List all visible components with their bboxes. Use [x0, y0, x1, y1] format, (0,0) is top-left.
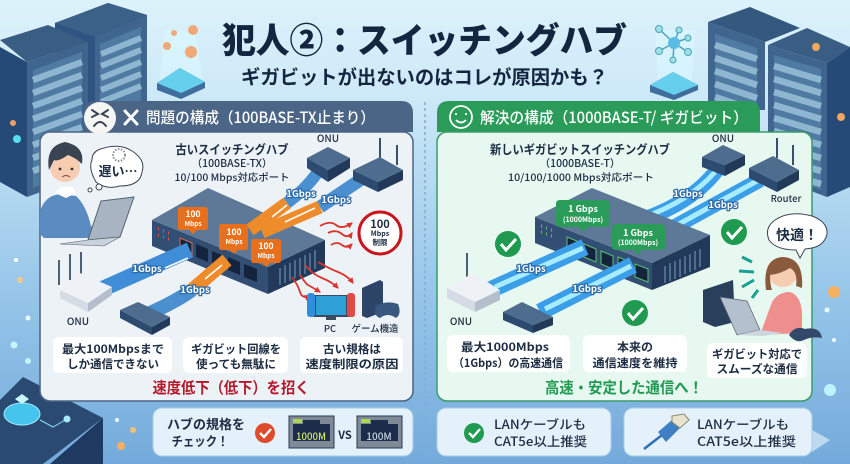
- divider: [424, 102, 426, 456]
- VS: VS: [337, 427, 352, 443]
- note 1: しか通信できない: [67, 356, 159, 372]
- badges: 100 Mbps: 100: [258, 240, 274, 252]
- switch standard: （1000BASE-T）: [540, 156, 620, 171]
- ONU white: [447, 253, 500, 312]
- cable speed labels: 1Gbps: [516, 261, 546, 275]
- check marks: [495, 219, 747, 326]
- note 1: [53, 337, 172, 373]
- holographic device right: [650, 26, 698, 100]
- note 1: 最大1000Mbps: [461, 339, 549, 355]
- panel: LAN cable note with cable icon: [624, 408, 812, 456]
- result text: 速度低下（低下）を招く: [152, 376, 310, 398]
- note 1: （1Gbps）の高速通信: [453, 355, 563, 371]
- switch ports: 10/100 Mbps対応ポート: [174, 169, 290, 184]
- panel: check hub standard: [153, 408, 413, 456]
- badges: 100 Mbps: Mbps: [257, 250, 275, 260]
- badges: 100 Mbps: 100: [185, 208, 201, 220]
- labels PC and console: PC: [324, 321, 336, 335]
- top router: [353, 138, 403, 192]
- router: [749, 138, 799, 192]
- server bottom left: [0, 342, 103, 464]
- port 100M: [357, 416, 402, 448]
- rear cables: [287, 172, 363, 207]
- note 3: [300, 337, 403, 373]
- port 1000M: 1000M: [296, 428, 326, 443]
- labels PC and console: [324, 321, 399, 335]
- limit sign: 100: [370, 216, 390, 232]
- badge: 1 Gbps second: [612, 224, 665, 255]
- panel: LAN cable note with cable icon: CAT5e以上推奨: [697, 431, 797, 450]
- port 100M: 100M: [366, 428, 392, 443]
- old switching hub: [152, 188, 325, 294]
- switch ports: 10/100/1000 Mbps対応ポート: [508, 169, 654, 184]
- note 1: 最大100Mbpsまで: [62, 341, 164, 357]
- note 2: 使っても無駄に: [196, 356, 276, 372]
- label ONU: ONU: [317, 130, 339, 145]
- cable speed labels: 1Gbps: [180, 282, 210, 296]
- icon: LAN cable: [644, 414, 689, 449]
- small switch: [503, 302, 553, 333]
- badge: 1 Gbps: 1 Gbps: [568, 202, 598, 215]
- cable speed labels: [516, 186, 738, 295]
- speech bubble: slow: [88, 146, 143, 192]
- subtitle: ギガビットが出ないのはコレが原因かも？: [241, 61, 608, 90]
- label router: Router: [771, 191, 801, 205]
- note 2: ギガビット回線を: [191, 341, 281, 357]
- ONU top: [702, 145, 745, 176]
- badge: 1 Gbps: (1000Mbps): [563, 215, 603, 225]
- panel: solution configuration: [437, 101, 827, 401]
- note 1: [447, 335, 570, 372]
- note 2: [583, 335, 687, 372]
- small switch: [120, 302, 170, 335]
- port 1000M: [289, 416, 334, 448]
- panel: problem configuration: [40, 101, 413, 401]
- rear cables: [635, 170, 760, 232]
- labels PC and console: ゲーム機造: [352, 321, 399, 335]
- note 3: 古い規格は: [323, 341, 382, 357]
- front cables: [490, 247, 633, 312]
- label ONU: ONU: [712, 130, 734, 145]
- header text: 解決の構成（1000BASE-T/ ギガビット）: [480, 106, 748, 128]
- cable speed labels: 1Gbps: [286, 186, 316, 200]
- note 3: [707, 343, 807, 378]
- panel header: [84, 101, 413, 132]
- person with laptop: [703, 257, 822, 341]
- cable speed labels: 1Gbps: [708, 197, 738, 211]
- switch heading: 新しいギガビットスイッチングハブ: [490, 139, 670, 158]
- panel header: [437, 101, 760, 132]
- note 2: 本来の: [617, 339, 653, 355]
- panel body: [437, 132, 812, 401]
- label ONU bottom: ONU: [450, 313, 472, 328]
- badge: 1 Gbps second: 1 Gbps: [623, 226, 653, 239]
- game console and PC: [307, 280, 400, 320]
- title: 犯人②：スイッチングハブ: [222, 13, 627, 64]
- switch standard: （100BASE-TX）: [192, 156, 272, 171]
- cable speed labels: 1Gbps: [673, 186, 703, 200]
- panel: LAN cable note: [437, 408, 611, 456]
- badge: 1 Gbps: [556, 200, 610, 232]
- speech bubble: comfortable: [767, 214, 827, 258]
- x mark: [125, 111, 137, 124]
- label ONU bottom: ONU: [67, 313, 89, 328]
- limit sign: [359, 212, 401, 254]
- note 2: 通信速度を維持: [592, 355, 678, 371]
- check icon: [255, 423, 275, 443]
- person with laptop: [40, 142, 134, 246]
- cable speed labels: 1Gbps: [132, 261, 162, 275]
- smile icon: [450, 106, 472, 128]
- heat arrows: [292, 223, 353, 297]
- server racks right: [708, 7, 850, 197]
- server racks left: [0, 3, 147, 197]
- panel: check hub standard: ハブの規格を: [167, 414, 245, 433]
- badge: 1 Gbps second: (1000Mbps): [618, 238, 658, 248]
- header text: 問題の構成（100BASE-TX止まり）: [146, 106, 375, 128]
- badges: 100 Mbps: [178, 207, 281, 267]
- front cables: [100, 203, 320, 313]
- note 3: 速度制限の原因: [306, 356, 398, 372]
- note 3: スムーズな通信: [716, 361, 798, 377]
- sad face icon: [84, 102, 116, 134]
- panel: LAN cable note: CAT5e以上推奨: [494, 431, 588, 450]
- holographic device left: [157, 25, 205, 99]
- speech bubble: slow: 遅い…: [98, 161, 138, 180]
- note 3: ギガビット対応で: [712, 346, 802, 362]
- gigabit switching hub: [535, 188, 710, 290]
- badges: 100 Mbps: Mbps: [225, 236, 243, 246]
- badges: 100 Mbps: Mbps: [184, 218, 202, 228]
- speech bubble: comfortable: 快適！: [776, 225, 818, 245]
- ONU white: [59, 252, 112, 312]
- badges: 100 Mbps: 100: [226, 226, 242, 238]
- switch heading: 古いスイッチングハブ: [176, 139, 289, 158]
- note 2: [183, 337, 288, 373]
- sparkles and lights: [14, 258, 840, 452]
- limit sign: 制限: [372, 237, 388, 248]
- panel: check hub standard: チェック！: [172, 431, 228, 450]
- panel: LAN cable note: LANケーブルも: [494, 414, 586, 433]
- top ONU: [307, 147, 350, 182]
- cable speed labels: 1Gbps: [572, 281, 602, 295]
- joy rays: [739, 257, 758, 298]
- cable speed labels: [132, 186, 351, 296]
- result text: 高速・安定した通信へ！: [545, 376, 703, 398]
- panel: LAN cable note with cable icon: LANケーブルも: [697, 414, 789, 433]
- panel body: [40, 132, 413, 401]
- limit sign: Mbps: [371, 229, 390, 239]
- cable speed labels: 1Gbps: [321, 192, 351, 206]
